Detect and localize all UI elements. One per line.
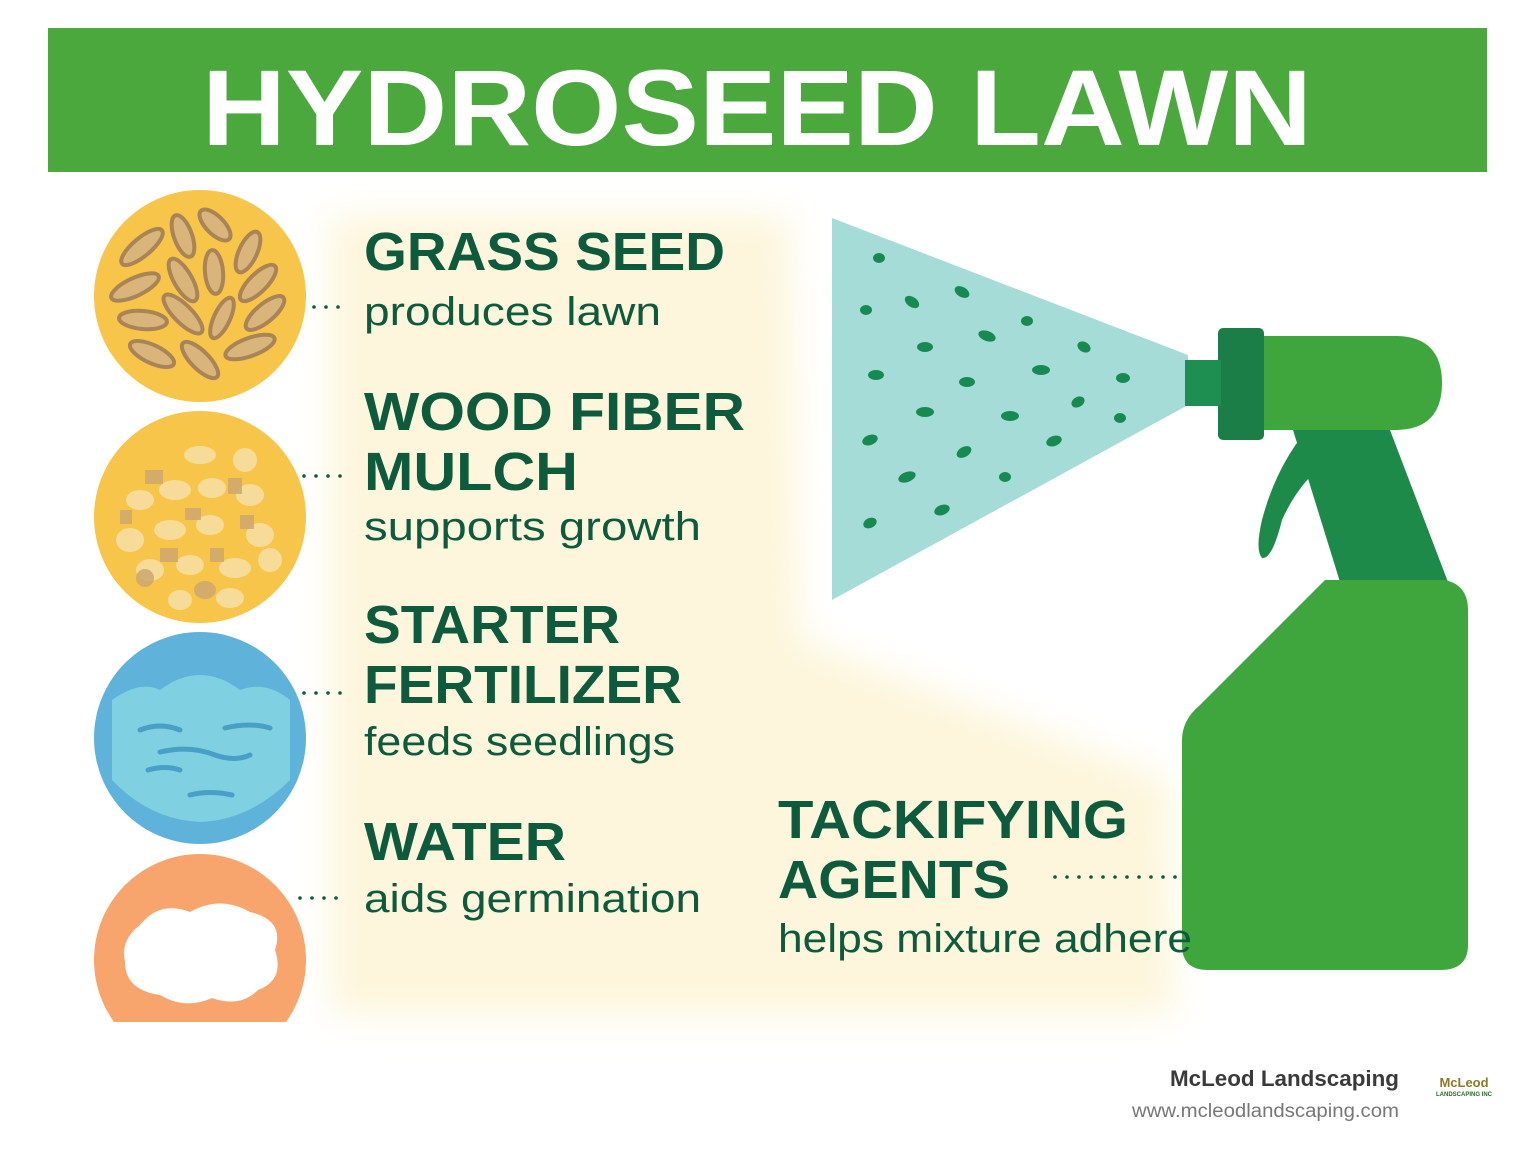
logo: [1436, 1075, 1493, 1098]
text: tackifying agents: AGENTS: [778, 850, 1010, 910]
text: water: aids germination: [364, 877, 701, 921]
spray bottle: [1182, 328, 1468, 970]
connectors: [298, 305, 342, 900]
icon: wood fiber mulch: [94, 411, 306, 623]
text: water: WATER: [364, 812, 566, 872]
spray cone: [832, 218, 1188, 600]
text: wood fiber mulch: WOOD FIBER: [364, 382, 745, 442]
text: starter fertilizer: STARTER: [364, 595, 620, 655]
background glow: [330, 215, 1175, 1015]
text: water: [364, 812, 701, 921]
logo: McLeod: [1439, 1075, 1489, 1090]
logo: LANDSCAPING INC: [1436, 1092, 1493, 1098]
footer brand: [1131, 1066, 1399, 1122]
text: grass seed: produces lawn: [364, 290, 661, 334]
text: wood fiber mulch: MULCH: [364, 442, 578, 502]
text: grass seed: [364, 222, 725, 334]
icon: water: [94, 854, 306, 1022]
text: grass seed: GRASS SEED: [364, 222, 725, 282]
tackifying connector: [1053, 875, 1177, 879]
text: tackifying agents: [778, 790, 1192, 961]
text: wood fiber mulch: [364, 382, 745, 549]
icon: starter fertilizer: [94, 632, 306, 844]
text: starter fertilizer: FERTILIZER: [364, 655, 682, 715]
text: tackifying agents: helps mixture adhere: [778, 917, 1192, 961]
footer brand: www.mcleodlandscaping.com: [1131, 1101, 1399, 1122]
text: tackifying agents: TACKIFYING: [778, 790, 1128, 850]
text: wood fiber mulch: supports growth: [364, 505, 701, 549]
text: starter fertilizer: feeds seedlings: [364, 720, 675, 764]
footer brand: McLeod Landscaping: [1170, 1066, 1399, 1091]
icon: grass seed: [94, 190, 306, 402]
title banner: HYDROSEED LAWN: [202, 47, 1312, 168]
text: starter fertilizer: [364, 595, 682, 764]
title banner: [48, 28, 1487, 172]
